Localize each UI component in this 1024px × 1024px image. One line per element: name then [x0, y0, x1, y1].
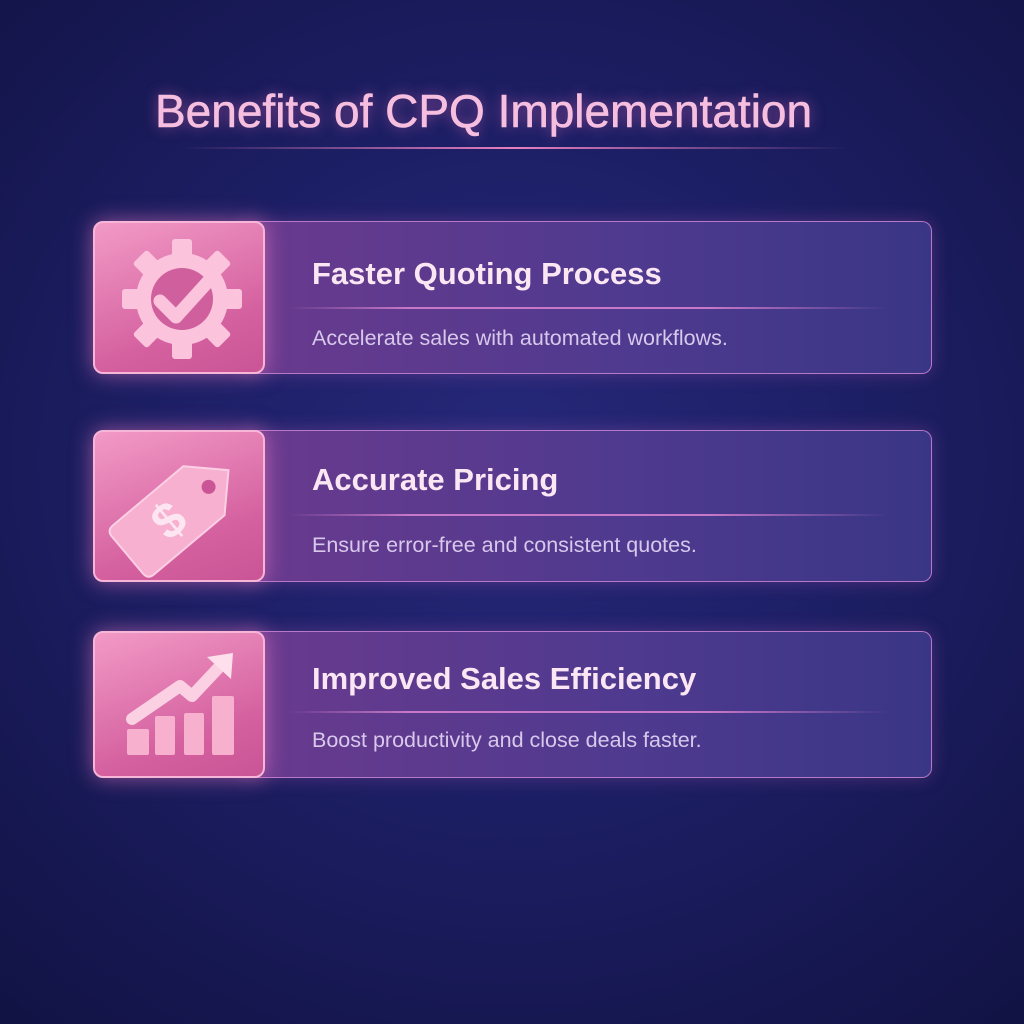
description: Ensure error-free and consistent quotes.	[312, 533, 697, 557]
card: faster quoting	[78, 206, 940, 389]
card: accurate pricing	[78, 415, 940, 597]
icon: growth chart	[93, 631, 265, 778]
heading: Accurate Pricing	[312, 462, 558, 497]
heading: Improved Sales Efficiency	[312, 661, 696, 696]
description: Accelerate sales with automated workflows.	[312, 326, 728, 350]
heading: Faster Quoting Process	[312, 256, 662, 291]
icon: gear with check	[93, 221, 265, 374]
card: sales efficiency	[78, 616, 940, 794]
icon: price tag	[93, 430, 265, 582]
description: Boost productivity and close deals faster.	[312, 728, 702, 752]
title: Benefits of CPQ Implementation	[155, 85, 812, 137]
icon: price tag: $	[140, 490, 198, 551]
